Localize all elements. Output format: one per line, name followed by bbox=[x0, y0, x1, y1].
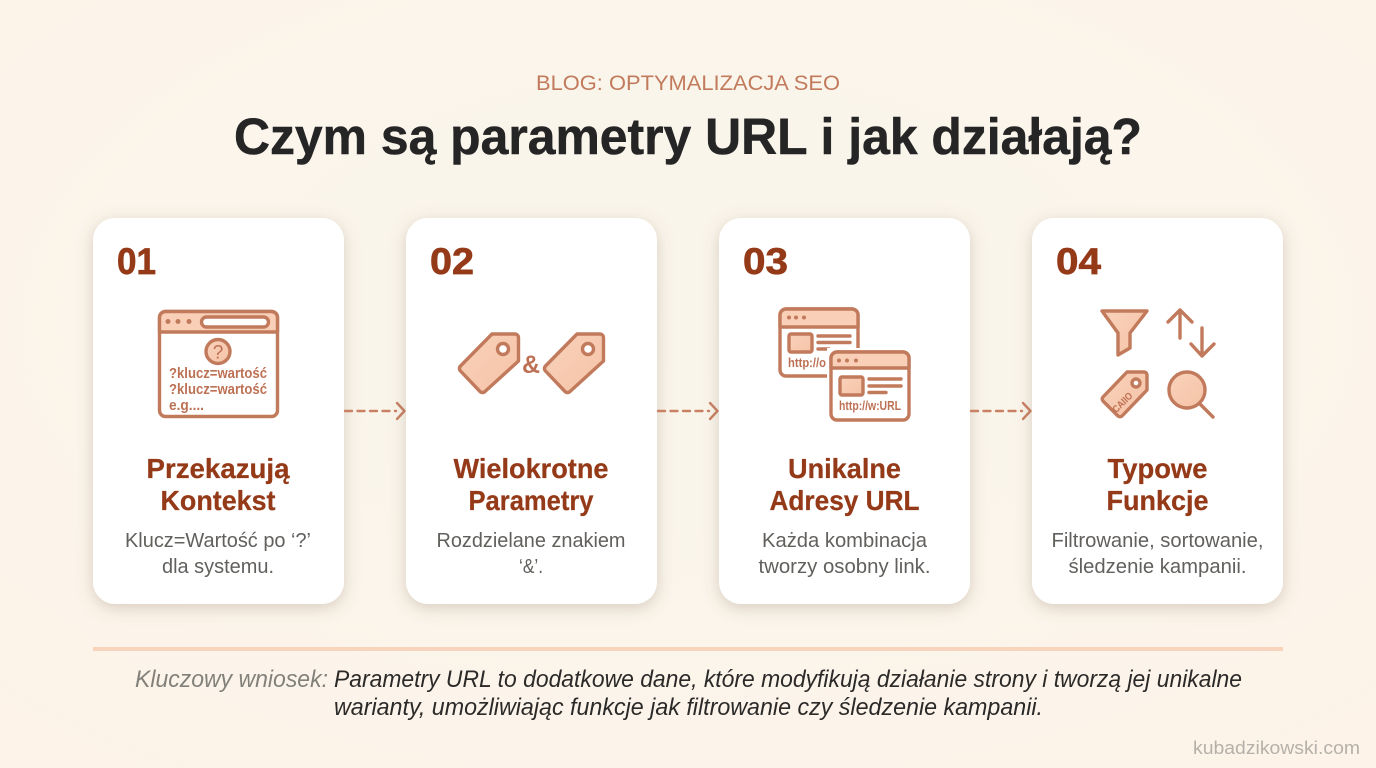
card 01 description bbox=[125, 530, 311, 578]
arrow: card 02 to 03 bbox=[658, 403, 718, 419]
arrow: card 03 to 04 bbox=[971, 403, 1030, 419]
card 04 description: śledzenie kampanii. bbox=[1068, 556, 1246, 578]
number 03: 03 bbox=[743, 241, 788, 282]
icon: browser window with query parameters bbox=[160, 312, 278, 416]
card 03 description bbox=[758, 530, 930, 578]
key takeaway: Parametry URL to dodatkowe dane, które modyfikują działanie strony i tworzą jej unikalne bbox=[334, 666, 1242, 693]
card 02 description bbox=[436, 530, 626, 578]
front window: http://w:URL bbox=[839, 398, 901, 413]
card 03 description: Każda kombinacja bbox=[762, 530, 928, 552]
sort arrows bbox=[1168, 310, 1214, 356]
card 04 description: Filtrowanie, sortowanie, bbox=[1052, 530, 1264, 552]
card 01 description: dla systemu. bbox=[162, 556, 274, 578]
icon: filter, sort, tag and search bbox=[1102, 310, 1214, 417]
card 02 heading bbox=[454, 453, 608, 516]
card 03 heading: Adresy URL bbox=[770, 485, 920, 516]
key takeaway: warianty, umożliwiając funkcje jak filtrowanie czy śledzenie kampanii. bbox=[334, 694, 1043, 721]
number 04: 04 bbox=[1056, 241, 1101, 282]
number 01: 01 bbox=[117, 241, 156, 282]
card 01 description: Klucz=Wartość po ‘?’ bbox=[125, 530, 311, 552]
campaign tag: CAIIO bbox=[1111, 391, 1136, 415]
card 04 heading: Typowe bbox=[1108, 453, 1208, 484]
card 04 description bbox=[1052, 530, 1264, 578]
card 01 heading bbox=[146, 453, 290, 516]
panel: card 01 bbox=[93, 218, 344, 604]
number 02: 02 bbox=[430, 241, 474, 282]
key takeaway bbox=[135, 666, 1242, 721]
funnel bbox=[1102, 311, 1147, 355]
watermark: kubadzikowski.com bbox=[1193, 738, 1360, 758]
card 03 description: tworzy osobny link. bbox=[758, 556, 930, 578]
icon: two tags joined by ampersand: & bbox=[522, 351, 540, 379]
title: Czym są parametry URL i jak działają? bbox=[234, 108, 1142, 165]
magnifier bbox=[1200, 404, 1213, 417]
icon: two browser windows with unique URLs bbox=[780, 309, 913, 424]
card 01 heading: Przekazują bbox=[146, 453, 290, 484]
arrow: card 01 to 02 bbox=[345, 403, 404, 419]
icon: browser window with query parameters: e.g.... bbox=[169, 398, 204, 414]
card 02 description: ‘&’. bbox=[519, 556, 543, 578]
card 04 heading bbox=[1106, 453, 1208, 516]
card 03 heading: Unikalne bbox=[788, 453, 901, 484]
panel: card 04 bbox=[1032, 218, 1283, 604]
back window: http://o bbox=[788, 355, 826, 370]
icon: browser window with query parameters: ? bbox=[213, 342, 223, 364]
card 02 heading: Parametry bbox=[468, 485, 594, 516]
icon: browser window with query parameters: ?klucz=wartość bbox=[169, 366, 267, 382]
card 02 description: Rozdzielane znakiem bbox=[436, 530, 626, 552]
card 02 heading: Wielokrotne bbox=[454, 453, 608, 484]
key takeaway: Kluczowy wniosek: bbox=[135, 666, 328, 693]
panel: card 03 bbox=[719, 218, 970, 604]
panel: card 02 bbox=[406, 218, 657, 604]
card 01 heading: Kontekst bbox=[160, 485, 276, 516]
icon: two tags joined by ampersand bbox=[459, 334, 604, 393]
eyebrow: blog category: BLOG: OPTYMALIZACJA SEO bbox=[536, 71, 840, 95]
card 04 heading: Funkcje bbox=[1106, 485, 1208, 516]
icon: browser window with query parameters: ?klucz=wartość bbox=[169, 382, 267, 398]
card 03 heading bbox=[770, 453, 920, 516]
